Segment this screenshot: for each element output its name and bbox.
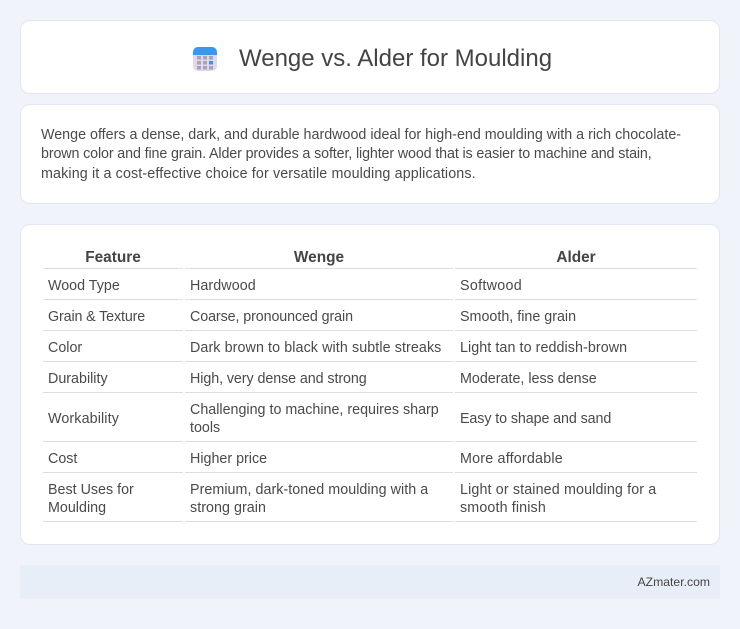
comparison table: Hardwood: [190, 278, 256, 294]
comparison table: Softwood: [460, 278, 522, 294]
comparison table: Higher price: [190, 451, 267, 467]
comparison table: strong grain: [190, 500, 266, 516]
comparison table: Coarse, pronounced grain: [190, 309, 353, 325]
column header: Feature: Feature: [85, 249, 141, 266]
intro text: [41, 127, 681, 182]
comparison table: Challenging to machine, requires sharp: [190, 402, 439, 418]
row: Durability: [48, 371, 597, 387]
comparison table: Color: [48, 340, 82, 356]
footer bar: [20, 565, 720, 599]
comparison table: Light tan to reddish-brown: [460, 340, 627, 356]
row: Wood Type: [48, 278, 522, 294]
row: Color: [48, 340, 627, 356]
title: Wenge vs. Alder for Moulding: [239, 45, 552, 72]
intro text: making it a cost-effective choice for versatile moulding applications.: [41, 166, 476, 182]
comparison table: Smooth, fine grain: [460, 309, 576, 325]
comparison table: tools: [190, 420, 220, 436]
intro text: Wenge offers a dense, dark, and durable hardwood ideal for high-end moulding with a rich chocolate-: [41, 127, 681, 143]
comparison table: High, very dense and strong: [190, 371, 367, 387]
column header: Wenge: Wenge: [294, 249, 344, 266]
comparison table card: [20, 224, 720, 545]
comparison table: Moulding: [48, 500, 106, 516]
comparison table: Cost: [48, 451, 77, 467]
icon: calendar: [193, 47, 217, 71]
comparison table: Wood Type: [48, 278, 120, 294]
comparison table: Easy to shape and sand: [460, 411, 611, 427]
row: Best Uses for Moulding: [48, 482, 656, 516]
comparison table: Durability: [48, 371, 108, 387]
intro text: brown color and fine grain. Alder provides a softer, lighter wood that is easier to machine and stain,: [41, 146, 652, 162]
comparison table: Grain & Texture: [48, 309, 145, 325]
comparison table: smooth finish: [460, 500, 546, 516]
comparison table: Dark brown to black with subtle streaks: [190, 340, 441, 356]
comparison table: Workability: [48, 411, 119, 427]
title card: [20, 20, 720, 94]
comparison table: Best Uses for: [48, 482, 134, 498]
comparison table: Premium, dark-toned moulding with a: [190, 482, 428, 498]
comparison table: More affordable: [460, 451, 563, 467]
comparison table: Light or stained moulding for a: [460, 482, 656, 498]
intro card: [20, 104, 720, 204]
comparison table: Moderate, less dense: [460, 371, 597, 387]
row: Cost: [48, 451, 563, 467]
footer text: AZmater.com: [638, 575, 710, 589]
column header: Alder: Alder: [556, 249, 596, 266]
row: Grain & Texture: [48, 309, 576, 325]
row: Workability: [48, 402, 611, 436]
